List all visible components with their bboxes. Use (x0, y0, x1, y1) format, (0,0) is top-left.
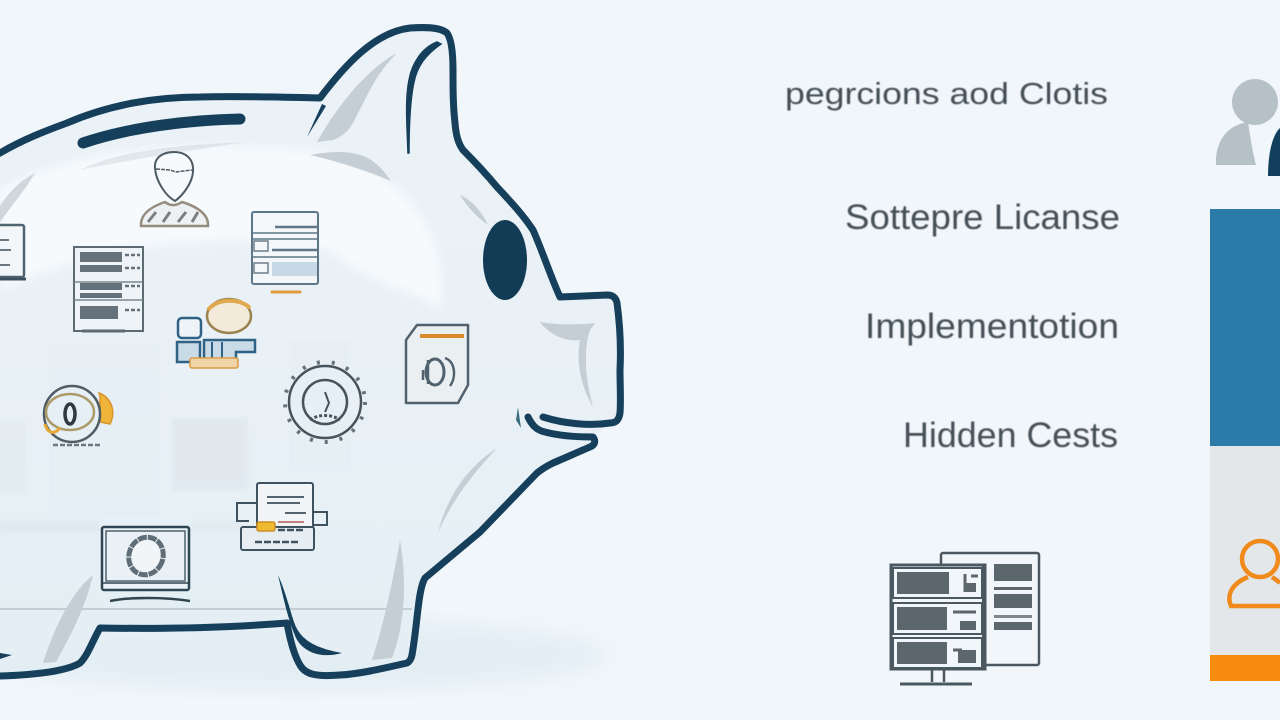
bar segment: blue (1210, 209, 1280, 446)
icon: gear gauge (285, 362, 365, 442)
label: depreciation and costs: pegrcions aod Clotis (785, 76, 1108, 111)
icon: gauge with flame (44, 386, 113, 445)
icon: laptop with shield (102, 527, 190, 601)
bar segment: orange (1210, 655, 1280, 681)
icon: server and tower (891, 553, 1039, 684)
icon: server rack (74, 247, 143, 331)
label: implementation: Implementotion (865, 307, 1119, 346)
eye (483, 220, 527, 300)
pig body fill (0, 28, 620, 678)
icon: people group (177, 299, 255, 368)
icon: document with orange header (406, 325, 468, 403)
coin slot (83, 119, 240, 143)
icon: laptop left edge (0, 225, 26, 279)
mouth mark (516, 407, 521, 428)
inner ear line (407, 42, 441, 153)
icon: orange user (1229, 541, 1280, 606)
icon: form list (252, 212, 318, 292)
label: hidden costs: Hidden Cests (903, 416, 1118, 455)
ground shadow (0, 619, 608, 691)
icon: printer with lock (237, 483, 327, 550)
piggy bank (0, 28, 620, 678)
icon: person (141, 152, 208, 226)
grey body highlights (0, 53, 595, 663)
lower jaw and legs outline (0, 417, 595, 678)
label: software license: Sottepre Licanse (845, 198, 1120, 237)
ear base tick (307, 104, 326, 137)
pig outline (0, 28, 620, 424)
leg inner line (278, 575, 342, 655)
stacked bar (1210, 209, 1280, 681)
faded background documents (0, 340, 350, 533)
floor line (0, 608, 412, 610)
inner highlight (0, 146, 441, 310)
bar segment: grey (1210, 446, 1280, 655)
icon: two users (1216, 79, 1280, 176)
